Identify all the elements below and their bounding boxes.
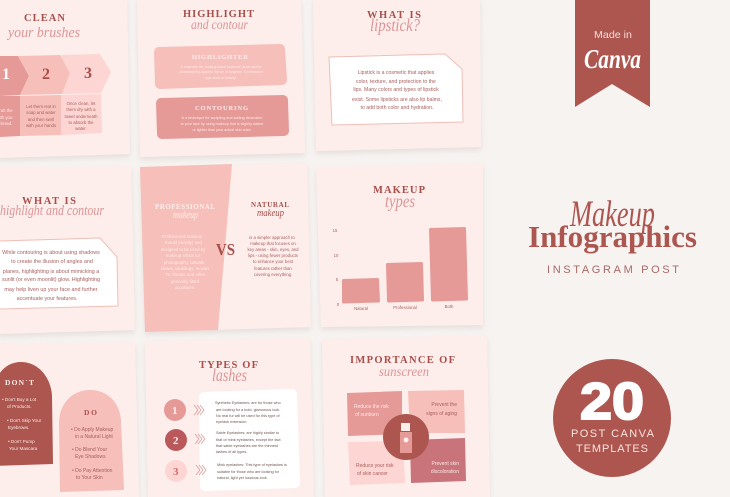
do arch (59, 390, 124, 492)
step numbers: 1 (2, 66, 10, 83)
step 2 chevron (18, 55, 70, 95)
ribbon: made in canva: Made in (594, 29, 632, 41)
script subtitle: types: types (385, 191, 415, 211)
title: makeup infographics: Makeup (569, 194, 655, 235)
don't arch: • Don't Buy a Lot (2, 397, 37, 402)
quadrant: sunburn (347, 391, 402, 436)
number 1 (164, 399, 186, 421)
title: makeup infographics (528, 194, 697, 254)
step numbers: 3 (84, 65, 92, 82)
title: makeup infographics: Infographics (528, 219, 697, 254)
natural column: features rather than (254, 266, 292, 271)
quadrant: skin cancer: Reduce your risk (356, 463, 394, 469)
title: highlight: HIGHLIGHT (183, 9, 254, 20)
ribbon: made in canva: Canva (584, 44, 641, 74)
natural column: to enhance your best (253, 259, 294, 264)
quadrant: aging: signs of aging (426, 411, 457, 417)
lash descriptions: No real fur will be used for this type of (216, 414, 280, 418)
highlighter box: HIGHLIGHTER (192, 54, 248, 61)
quadrant: skin cancer (348, 441, 405, 485)
lash descriptions: that sable eyelashes are the thinnest (216, 444, 279, 448)
don't arch: DON´T (5, 378, 34, 387)
number 3: 3 (173, 466, 179, 478)
arrows (194, 405, 206, 475)
natural column: key areas - skin, eyes, and (247, 247, 299, 252)
quadrant: discoloration: Prevent skin (431, 461, 459, 467)
panel: highlight and contour (137, 0, 305, 157)
don't arch: Eyebrows. (8, 425, 29, 430)
script subtitle: your brushes: your brushes (6, 25, 80, 41)
do arch: • Do Pay Attention (72, 468, 113, 474)
don't arch (0, 362, 53, 466)
panel: makeup types chart (316, 163, 483, 327)
badge: 20 post canva templates: 20 (580, 373, 644, 431)
definition box: planes, highlighting is about mimicking a (3, 269, 99, 275)
step 3 text column: them dry with a (66, 107, 96, 112)
lash descriptions: that of mink eyelashes, except the fact (216, 438, 282, 442)
lash descriptions: Sable Eyelashes: are highly similar to (216, 431, 279, 435)
quadrant: sunburn: of sunburn (355, 412, 379, 418)
bar chart: 15 (333, 228, 338, 233)
title: clean: CLEAN (24, 13, 65, 24)
natural column: makeup (257, 208, 284, 219)
lash descriptions (204, 394, 295, 486)
professional column: designed to be used by (161, 247, 206, 252)
panel: types of lashes (145, 337, 314, 497)
panel: do and don't (0, 342, 139, 497)
quadrant: sunburn: Reduce the risk (354, 404, 389, 410)
bar chart: 0 (337, 302, 340, 307)
number 2 (165, 429, 187, 451)
definition box: accentuate your features. (17, 296, 77, 302)
natural column: covering everything. (254, 272, 292, 277)
natural column: lips - using fewer products (248, 253, 298, 258)
script subtitle: and contour: and contour (191, 18, 248, 33)
bar chart: Natural (354, 306, 368, 311)
lash descriptions: suitable for those who are looking for (217, 470, 280, 474)
professional column: generally fitted (171, 279, 200, 284)
definition box: may help liven up your face and further (4, 287, 98, 293)
title: types of: TYPES OF (199, 360, 258, 371)
title: makeup: MAKEUP (373, 185, 426, 196)
lipstick definition box: Lipstick is a cosmetic that applies (358, 70, 435, 76)
lipstick definition box: lips. Many colors and types of lipstick (353, 87, 439, 93)
natural column: is a simpler approach to (249, 235, 295, 240)
script subtitle: lipstick: lipstick? (370, 15, 420, 35)
step 3 text column: Once clean, let (67, 101, 96, 106)
panel: what is highlight and contour (0, 166, 135, 334)
contouring box: is a technique for sculpting and adding dimension (182, 116, 262, 120)
badge: 20 post canva templates: POST CANVA (571, 428, 655, 440)
quadrant: aging: Prevent the (431, 402, 457, 408)
definition box: to create the illusion of angles and (11, 259, 93, 265)
definition box: sunlit (or even moonlit) glow. Highlighting (2, 277, 100, 283)
lipstick definition box: exist. Some lipsticks are also lip balms, (352, 97, 442, 103)
don't arch: Your Mascara (9, 446, 38, 451)
don't arch: of Products. (7, 404, 32, 409)
professional column: makeup (173, 210, 198, 221)
number 1: 1 (172, 405, 178, 417)
contouring box: CONTOURING (195, 105, 248, 112)
panel: clean your brushes (0, 0, 130, 158)
highlighter box: cheekbones) appear lighter or brighter. To enhance (179, 70, 263, 74)
vs label: VS (216, 240, 235, 259)
do arch: • Do Apply Makeup (71, 427, 114, 433)
step numbers (2, 65, 92, 83)
lash descriptions: natural, light yet luscious look. (217, 476, 268, 480)
bar chart (333, 228, 466, 311)
step 1 chevron (0, 56, 29, 96)
step 2 text column: and then swirl (28, 117, 54, 122)
natural column (247, 201, 299, 277)
step 3 text column: water. (75, 126, 87, 131)
do arch: DO (84, 408, 97, 417)
title: what is: WHAT IS (22, 196, 76, 207)
do arch: • Do Blend Your (72, 447, 107, 453)
natural column: NATURAL (251, 201, 289, 209)
panel: what is lipstick (313, 0, 481, 151)
step 1 text column (0, 96, 20, 137)
panel: professional vs natural makeup (140, 163, 311, 332)
title: importance of: IMPORTANCE OF (350, 355, 455, 366)
professional column: shows, weddings, movies (161, 266, 209, 271)
do arch: in a Natural Light (75, 434, 113, 440)
step numbers: 2 (42, 66, 50, 83)
highlighter box (159, 49, 282, 84)
contouring box (161, 100, 284, 134)
professional column: makeup artists for (166, 253, 201, 258)
step 2 text column: Let them rest in (26, 104, 56, 109)
professional column: should (mostly) and (164, 240, 202, 245)
quadrant: discoloration: discoloration (431, 469, 459, 475)
bar chart: 10 (334, 253, 339, 258)
subtitle: instagram post: INSTAGRAM POST (547, 264, 679, 276)
lipstick definition box (329, 54, 463, 125)
bar chart: Both (445, 304, 454, 309)
professional column: occasions. (175, 285, 195, 290)
don't arch: • Don't Pump (8, 439, 35, 444)
professional column: Professional makeup (162, 234, 203, 239)
step 3 chevron (60, 54, 111, 94)
professional column: TV, theatre and other (165, 272, 206, 277)
step 2 text column: soap and water (26, 110, 56, 115)
lash descriptions: eyelash extension. (216, 420, 247, 424)
step 3 text column (61, 94, 102, 135)
do arch: Eye Shadows (75, 454, 106, 460)
lash descriptions: Synthetic Eyelashes: are for those who (215, 401, 281, 405)
contouring box: or lighter than your actual skin color. (192, 128, 252, 132)
contouring box: to your face by using makeup that is slightly darker (181, 122, 264, 126)
step 2 text column (20, 95, 61, 136)
lipstick definition box: color, texture, and protection to the (356, 79, 436, 85)
lash descriptions: Mink eyelashes: This type of eyelashes is (217, 463, 287, 467)
highlighter box: A cosmetic for making facial features (such as the (180, 65, 262, 69)
step 3 text column: towel underneath (65, 114, 98, 119)
quadrant: discoloration (410, 438, 466, 483)
script subtitle: sunscreen: sunscreen (379, 365, 429, 380)
definition box (0, 238, 118, 309)
definition box: While contouring is about using shadows (2, 250, 100, 256)
script subtitle: highlight and contour: highlight and contour (0, 203, 104, 219)
panel: importance of sunscreen (322, 335, 490, 497)
ribbon: made in canva (575, 0, 650, 107)
lash descriptions: lashes of all types. (216, 450, 247, 454)
lipstick definition box: to add both color and hydration. (361, 105, 433, 111)
do arch: to Your Skin (76, 475, 103, 481)
title: what is: WHAT IS (367, 10, 421, 21)
professional column: PROFESSIONAL (155, 203, 215, 211)
professional column: photography, catwalk (164, 260, 205, 265)
badge: 20 post canva templates: TEMPLATES (576, 443, 648, 455)
highlighter box: eye area or beauty. (205, 76, 237, 80)
step 1 text column: ith you (0, 115, 13, 120)
lash descriptions: are looking for a bold, glamorous look. (216, 408, 280, 412)
step 3 text column: to absorb the (68, 120, 94, 125)
bar chart: 5 (336, 277, 339, 282)
number 3 (165, 460, 187, 482)
badge: 20 post canva templates (553, 359, 671, 477)
professional column (140, 164, 232, 332)
number 2: 2 (173, 435, 179, 447)
natural column: makeup that focuses on (250, 241, 296, 246)
quadrant: aging (408, 390, 465, 433)
script subtitle: lashes: lashes (212, 365, 247, 385)
bar chart: Professional (393, 305, 417, 310)
quadrant: skin cancer: of skin cancer (357, 471, 388, 477)
step 2 text column: with your hands (26, 123, 56, 128)
icon: sunscreen bottle (383, 414, 429, 460)
don't arch: • Don't Skip Your (7, 418, 42, 423)
